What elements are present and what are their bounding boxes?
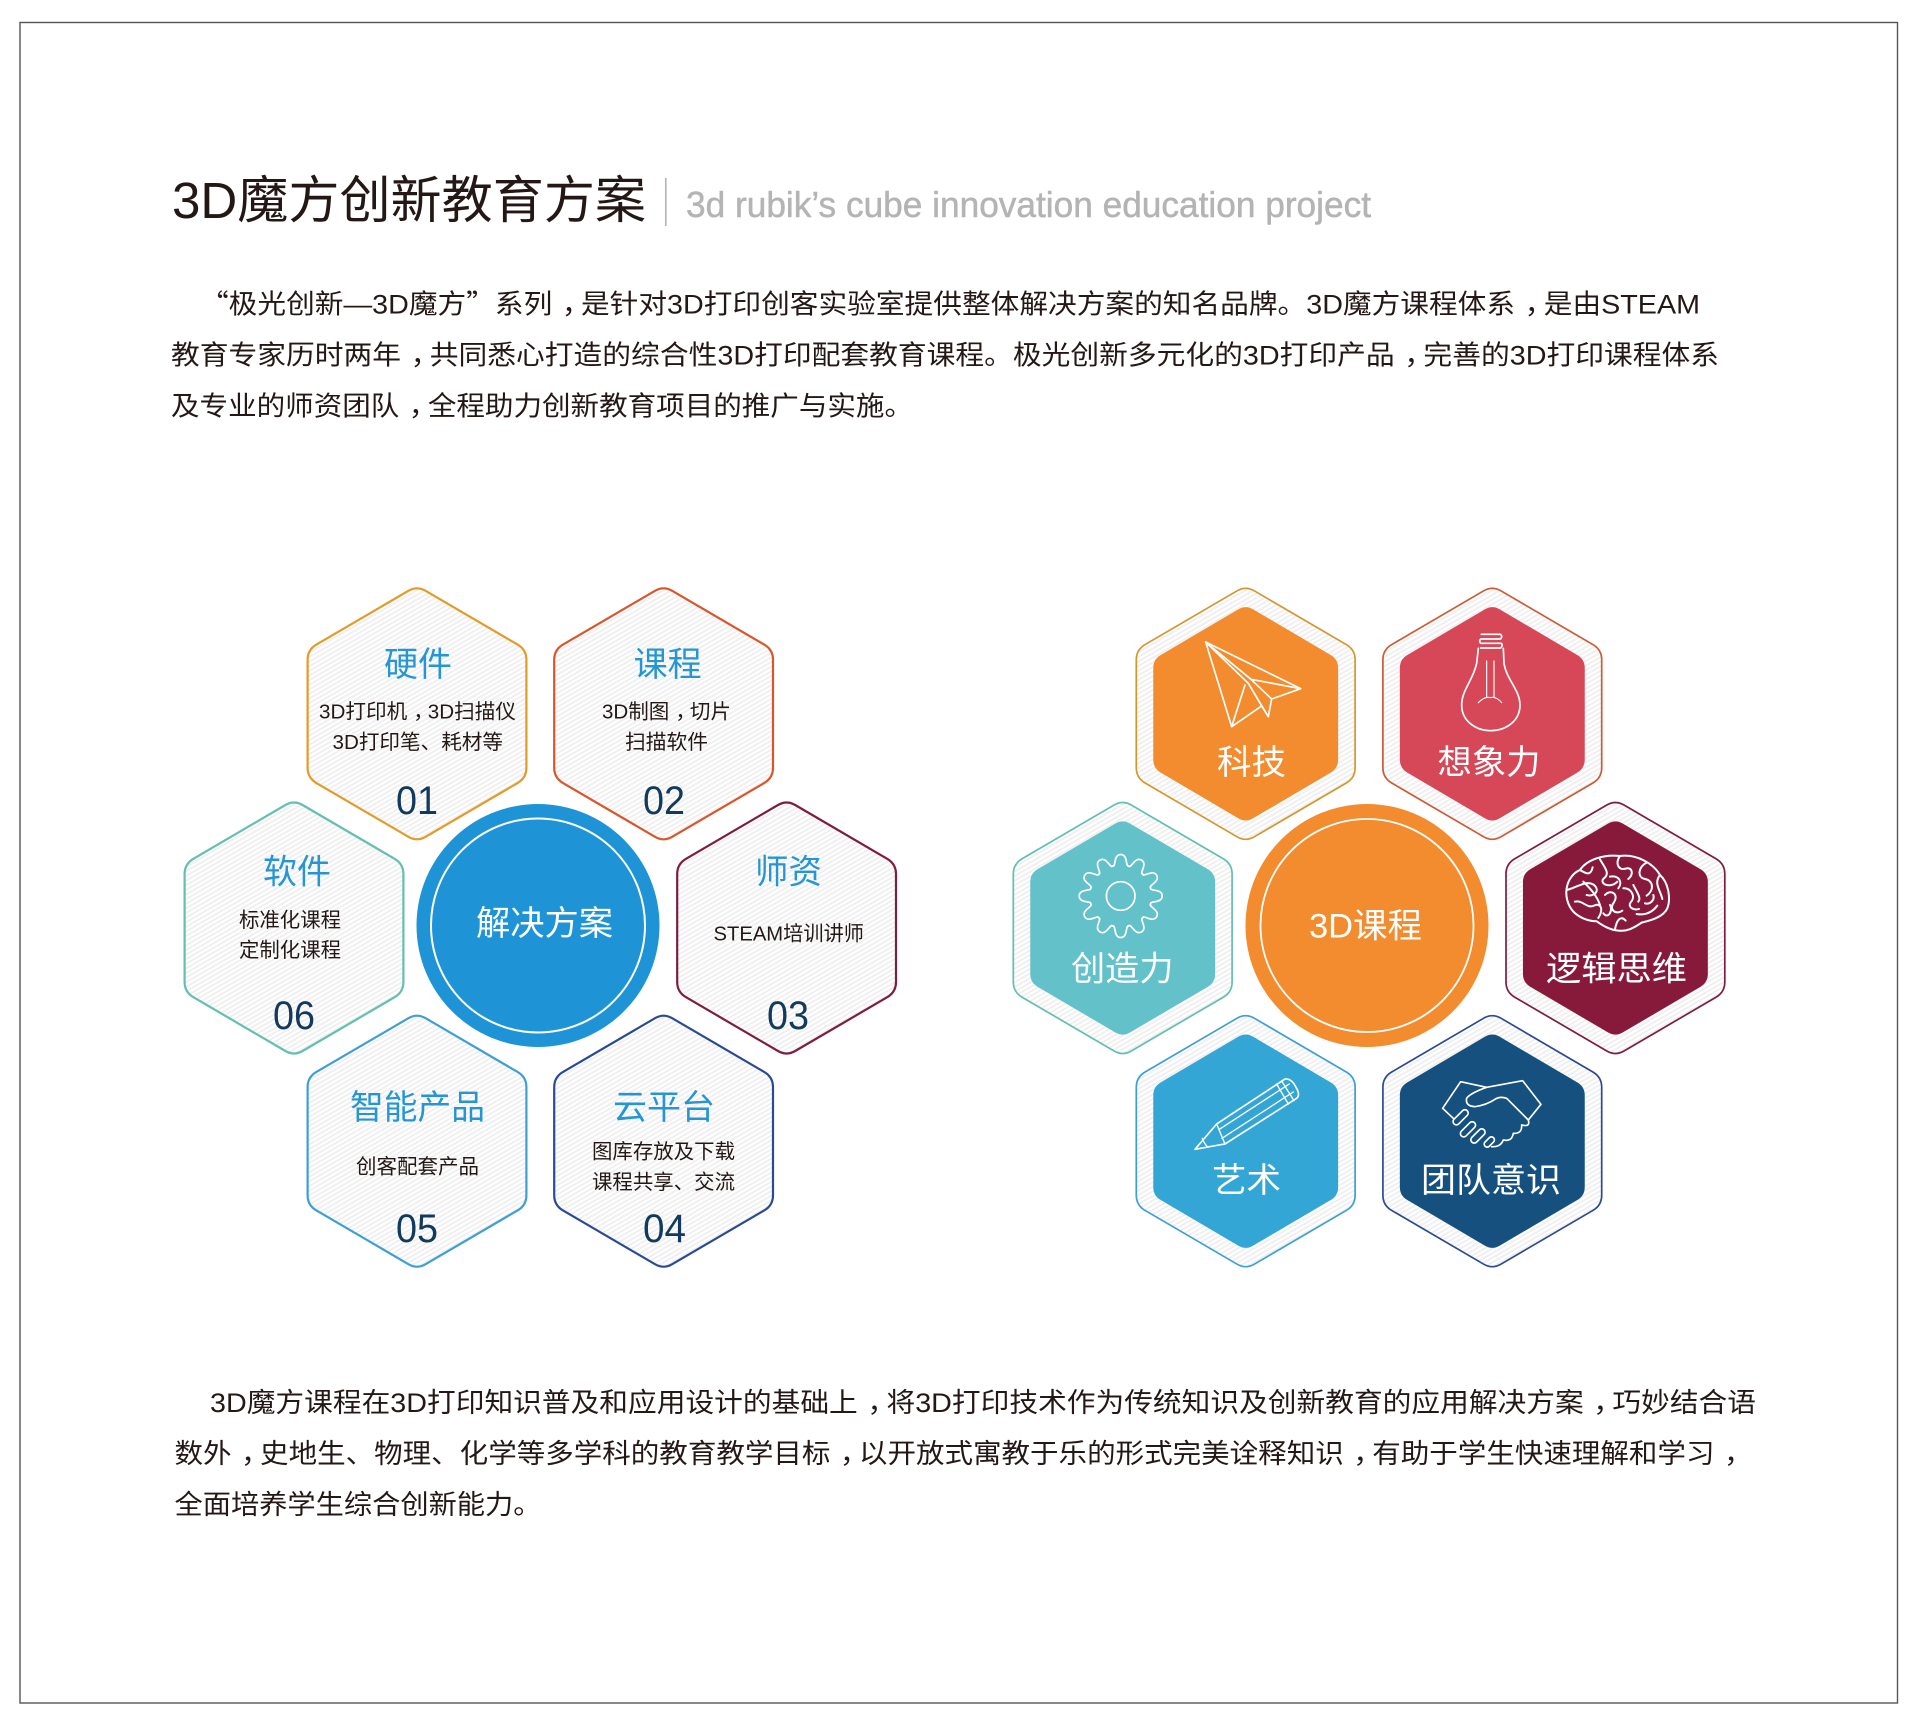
hex 05 smart products: 05 — [396, 1207, 438, 1251]
hex 04 cloud platform — [554, 1016, 773, 1267]
hex 05 smart products: 创客配套产品 — [356, 1156, 479, 1178]
panel: course hexagon cluster — [1013, 588, 1725, 1267]
hex 05 smart products — [308, 1016, 526, 1267]
hex team spirit — [1383, 1016, 1602, 1267]
icon: paper plane — [1206, 642, 1301, 727]
center circle solutions — [416, 804, 660, 1047]
hex 04 cloud platform: 04 — [643, 1207, 686, 1251]
closing paragraph: 数外 ，史地生、物理、化学等多学科的教育教学目标 ，以开放式寓教于乐的形式完美诠释知识 ，有助于学生快速理解和学习 ， — [174, 1439, 1752, 1469]
intro paragraph — [171, 282, 1719, 422]
icon: handshake — [1443, 1081, 1541, 1148]
hex 04 cloud platform: 云平台 — [613, 1089, 715, 1127]
hex 04 cloud platform: 图库存放及下载 — [592, 1140, 735, 1164]
main title: 3D魔方创新教育方案 — [172, 172, 646, 229]
icon: brain — [1566, 856, 1669, 931]
title separator — [665, 178, 667, 226]
hex logical thinking — [1506, 802, 1725, 1054]
hex 02 curriculum: 课程 — [634, 646, 702, 684]
english subtitle: 3d rubik’s cube innovation education project — [686, 184, 1371, 225]
hex technology: 科技 — [1217, 744, 1286, 782]
intro paragraph: 教育专家历时两年 ，共同悉心打造的综合性3D打印配套教育课程。极光创新多元化的3D打印产品 ，完善的3D打印课程体系 — [171, 340, 1719, 370]
hex 03 teachers — [677, 802, 896, 1054]
hex 02 curriculum: 3D制图 ，切片 — [602, 700, 731, 723]
hex art: 艺术 — [1212, 1162, 1281, 1200]
hex 02 curriculum: 扫描软件 — [625, 731, 708, 754]
closing paragraph: 全面培养学生综合创新能力。 — [174, 1490, 542, 1520]
icon: pencil — [1195, 1079, 1298, 1149]
hex technology — [1136, 588, 1355, 839]
hex imagination — [1383, 588, 1602, 839]
hex 06 software: 软件 — [263, 854, 331, 892]
hex 06 software: 06 — [273, 994, 315, 1038]
center circle 3D course: 3D课程 — [1309, 908, 1422, 946]
hex 04 cloud platform: 课程共享、交流 — [592, 1171, 735, 1194]
hex 02 curriculum — [554, 588, 773, 839]
hex team spirit: 团队意识 — [1421, 1162, 1561, 1200]
hex 03 teachers: 师资 — [755, 854, 822, 892]
closing paragraph — [174, 1388, 1756, 1520]
hex 01 hardware: 3D打印笔、耗材等 — [332, 731, 503, 754]
hex creativity: 创造力 — [1071, 950, 1174, 988]
icon: gear — [1079, 854, 1162, 938]
hex 02 curriculum: 02 — [643, 779, 685, 823]
intro paragraph: “极光创新—3D魔方 ”系列 ，是针对3D打印创客实验室提供整体解决方案的知名品牌。3D魔方课程体系 ，是由STEAM — [200, 282, 1700, 322]
closing paragraph: 3D魔方课程在3D打印知识普及和应用设计的基础上 ，将3D打印技术作为传统知识及创新教育的应用解决方案 ，巧妙结合语 — [210, 1388, 1756, 1418]
hex 01 hardware: 硬件 — [384, 646, 452, 684]
hex 06 software: 标准化课程 — [239, 909, 341, 932]
center circle 3D course — [1246, 804, 1488, 1047]
hex 06 software — [185, 802, 403, 1054]
hex 03 teachers: 03 — [767, 994, 809, 1038]
hex creativity — [1013, 802, 1232, 1054]
hex 01 hardware: 01 — [396, 779, 438, 823]
hex art — [1136, 1016, 1355, 1267]
intro paragraph: 及专业的师资团队 ，全程助力创新教育项目的推广与实施。 — [171, 392, 913, 422]
panel: solutions hexagon cluster — [185, 588, 896, 1267]
center circle solutions: 解决方案 — [476, 905, 613, 943]
hex 03 teachers: STEAM培训讲师 — [714, 922, 864, 946]
hex 06 software: 定制化课程 — [239, 939, 341, 962]
icon: light bulb — [1462, 634, 1520, 731]
title block — [172, 172, 1371, 229]
hex 01 hardware — [308, 588, 526, 839]
hex logical thinking: 逻辑思维 — [1546, 950, 1687, 988]
hex imagination: 想象力 — [1438, 744, 1540, 782]
hex 05 smart products: 智能产品 — [350, 1089, 485, 1127]
hex 01 hardware: 3D打印机 ，3D扫描仪 — [319, 700, 516, 723]
